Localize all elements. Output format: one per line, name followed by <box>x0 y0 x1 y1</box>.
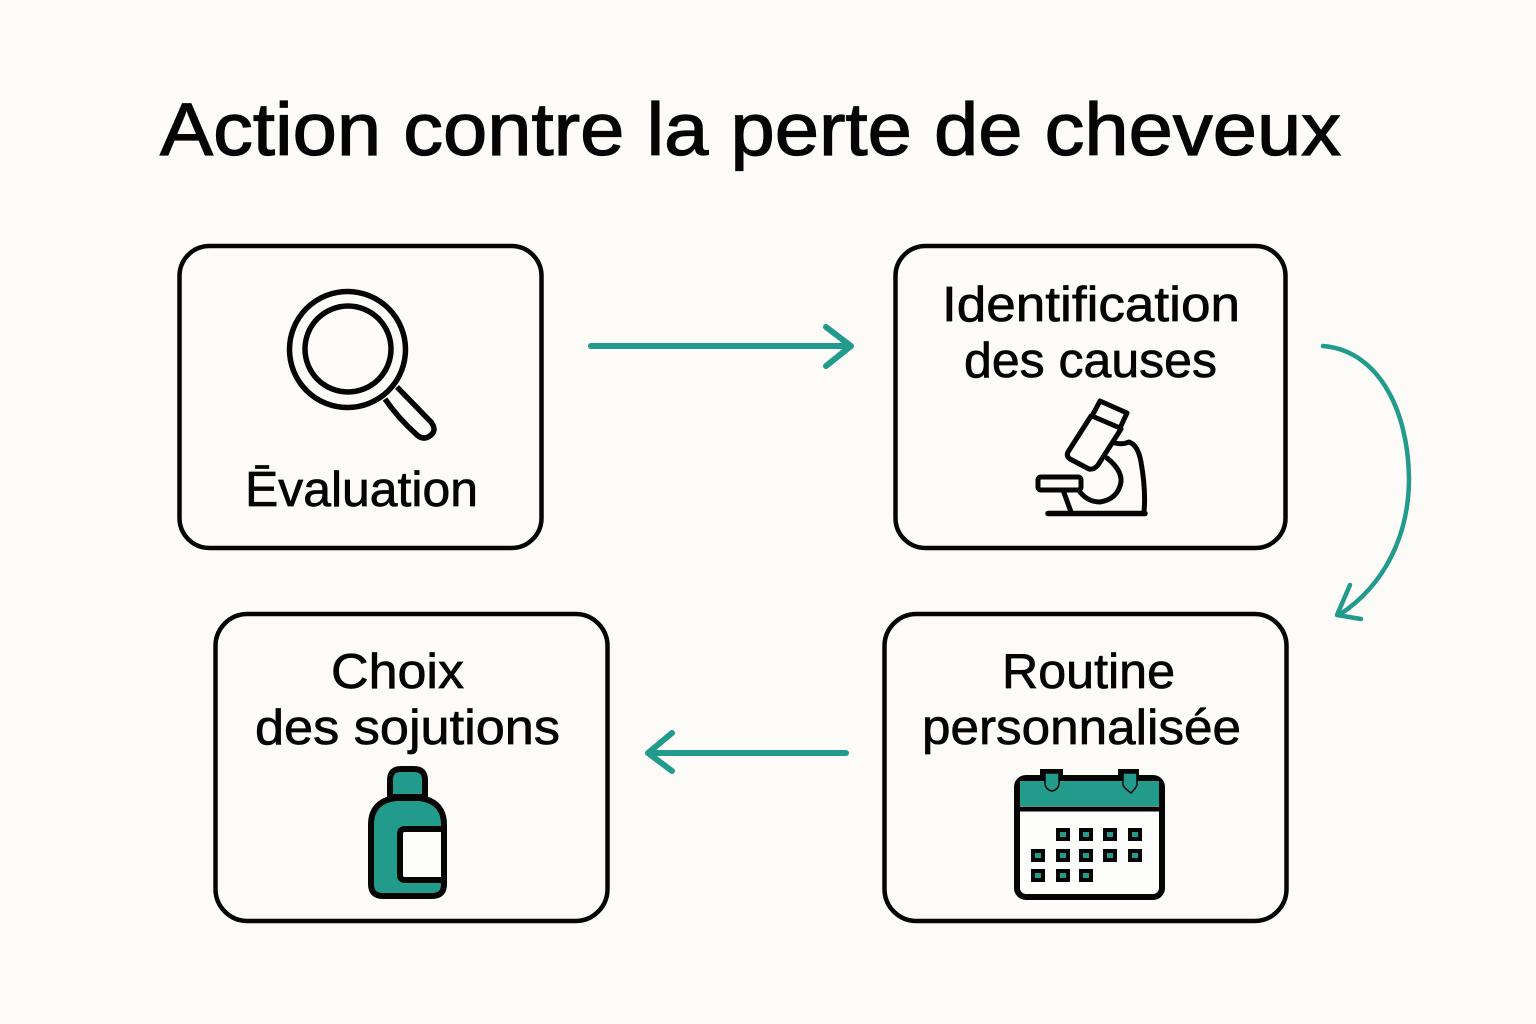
label: Routine personnalisée: Routine <box>1002 645 1175 699</box>
arrow: évaluation to identification <box>591 327 851 366</box>
icon: bottle <box>371 769 444 896</box>
label: Choix des sojutions: des sojutions <box>255 701 560 755</box>
label: Identification des causes <box>942 278 1240 388</box>
icon: calendar <box>1017 769 1162 897</box>
label: Évaluation: Ēvaluation <box>245 463 478 517</box>
icon: microscope <box>1038 401 1145 514</box>
panel: identification des causes <box>896 246 1286 548</box>
title: Action contre la perte de cheveux <box>160 88 1341 171</box>
label: Choix des sojutions <box>255 645 560 755</box>
label: Identification des causes: Identification <box>942 278 1240 332</box>
label: Identification des causes: des causes <box>964 334 1217 388</box>
label: Choix des sojutions: Choix <box>331 645 464 699</box>
panel: évaluation <box>180 246 542 548</box>
icon: magnifying glass <box>290 292 434 438</box>
panel: choix des solutions <box>216 614 608 921</box>
arrow: routine to choix <box>648 733 846 771</box>
panel: routine personnalisée <box>884 614 1286 921</box>
label: Routine personnalisée: personnalisée <box>922 701 1241 755</box>
arrow: identification to routine <box>1323 346 1409 619</box>
label: Routine personnalisée <box>922 645 1241 755</box>
